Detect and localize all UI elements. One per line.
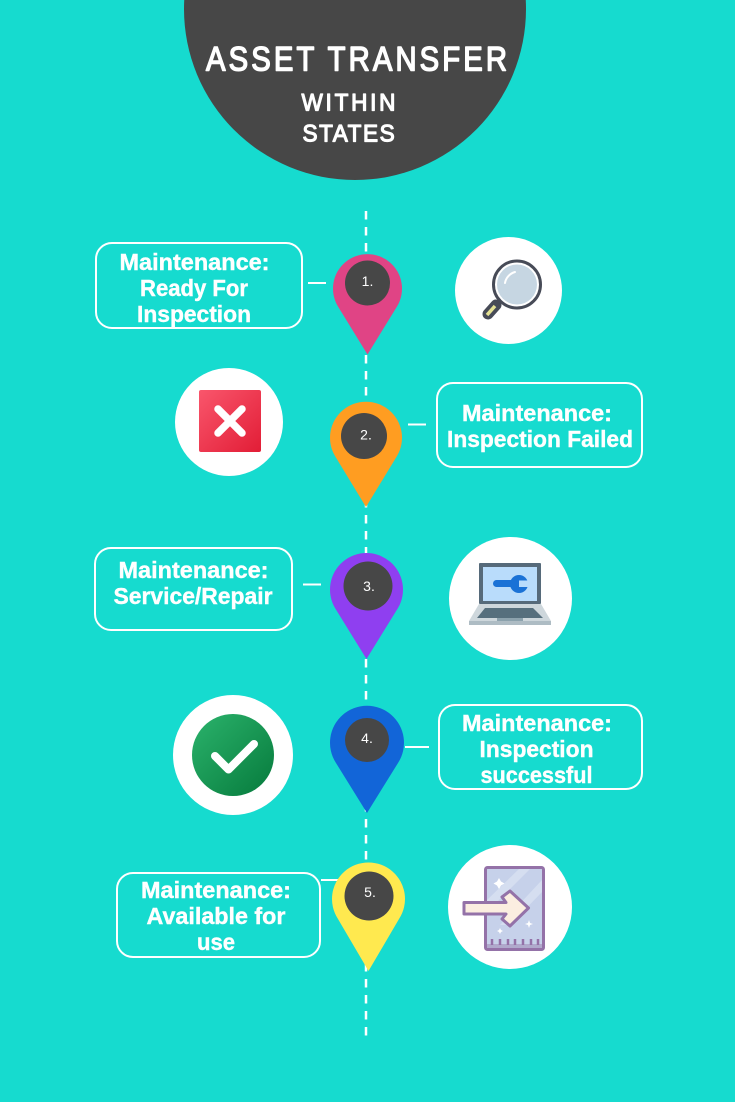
step 5 label: Available for — [146, 903, 286, 929]
step 4 icon: green check — [173, 695, 293, 815]
step 5 icon: door with arrow — [448, 845, 572, 969]
step 2 label: Maintenance: — [462, 400, 612, 426]
subtitle: WITHIN — [302, 89, 396, 116]
step 4 pin: 4. — [361, 730, 373, 746]
step 2 pin: 2. — [360, 426, 372, 442]
title: ASSET TRANSFER — [206, 39, 507, 78]
step 1 label: Maintenance: — [120, 249, 270, 275]
step 4 label — [439, 705, 642, 789]
step 4 label: successful — [480, 762, 592, 788]
step 3 pin: 3. — [363, 578, 375, 594]
step 4 label: Maintenance: — [462, 710, 612, 736]
step 5 pin — [332, 862, 405, 971]
step 4 pin — [330, 706, 404, 813]
step 2 label: Inspection Failed — [447, 426, 633, 452]
step 3 icon: laptop with wrench — [449, 537, 572, 660]
step 3 label: Maintenance: — [118, 557, 268, 583]
step 3 label — [95, 548, 292, 630]
step 3 label: Service/Repair — [114, 583, 273, 609]
step 5 label — [117, 873, 320, 957]
step 3 pin — [330, 553, 403, 659]
step 1 label: Inspection — [137, 301, 251, 327]
title badge — [184, 0, 526, 180]
step 4 label: Inspection — [480, 736, 594, 762]
title badge: STATES — [302, 120, 395, 147]
step 2 label — [437, 383, 642, 467]
step 5 label: use — [197, 929, 235, 955]
step 1 pin: 1. — [362, 273, 373, 289]
step 1 pin — [333, 254, 402, 354]
step 5 pin: 5. — [364, 884, 376, 900]
step 1 label — [96, 243, 302, 328]
step 1 label: Ready For — [140, 275, 248, 301]
step 2 icon: red cross — [175, 368, 283, 476]
step 1 icon: magnifying glass — [455, 237, 562, 344]
step 2 pin — [330, 402, 402, 507]
step 5 label: Maintenance: — [141, 877, 291, 903]
